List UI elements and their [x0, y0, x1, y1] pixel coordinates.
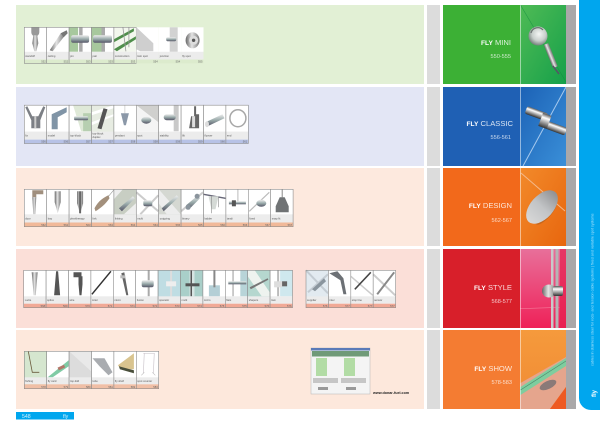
heading: fly show: FLY SHOW [474, 364, 513, 373]
thumb: top-block duplex: duplex [92, 135, 101, 139]
thumb: tube: tube [92, 379, 98, 383]
thumb: ceiling [47, 27, 69, 64]
thumb: plexitherapy: plexitherapy [70, 216, 85, 220]
thumb: junction: junction [159, 54, 169, 58]
thumb: ladder: ladder [204, 216, 212, 220]
thumb: pair [92, 27, 114, 64]
thumb: snap fit [271, 189, 293, 227]
thumb: link [92, 189, 114, 227]
heading: fly style: FLY STYLE [474, 283, 512, 292]
photo: design oval spot [520, 184, 564, 230]
thumb: flyover: flyover [204, 134, 213, 138]
thumb: linking: linking [115, 216, 123, 220]
thumb: spot counter [136, 351, 159, 389]
panel: fly show products [16, 330, 424, 409]
thumb: door: 562 [41, 223, 46, 227]
thumb: inter: 577 [345, 304, 350, 308]
thumb: t-wire: 568 [41, 304, 46, 308]
thumb: junction [159, 27, 181, 64]
thumb: operator: operator [159, 298, 169, 302]
thumb: linking: 564 [131, 223, 136, 227]
thumb: plexitherapy [69, 189, 92, 227]
section card: fly classic [443, 87, 570, 166]
thumb: fly card: fly card [48, 379, 57, 383]
panel: fly design products [16, 168, 424, 246]
thumb: multi: 564 [153, 223, 158, 227]
grey column [427, 5, 440, 409]
thumb: fixed [248, 189, 271, 227]
thumb: end: end [227, 134, 232, 138]
thumb: stability: 559 [176, 140, 181, 144]
thumb: fusion: 572 [153, 304, 158, 308]
thumb: inter: inter [329, 298, 335, 302]
section card: fly mini [443, 5, 566, 84]
thumb: sensor: 577 [390, 304, 395, 308]
thumb: fishing [24, 351, 47, 389]
thumb: micro glass: micro [204, 298, 211, 302]
thumb: stability [159, 105, 181, 144]
thumb: bay: 562 [64, 223, 69, 227]
thumb: top-block duplex [92, 105, 114, 144]
thumb: shapers: shapers [249, 298, 259, 302]
thumb: stability: stability [160, 134, 169, 138]
thumb: micro [113, 270, 136, 308]
thumb: splice: 569 [63, 304, 68, 308]
thumb: t-wire: t-wire [25, 298, 32, 302]
thumb: flyover: 560 [220, 140, 225, 144]
heading: fly design: FLY DESIGN [469, 201, 512, 210]
thumb: fishing: fishing [25, 379, 34, 383]
page range: fly classic: 556-561 [490, 135, 511, 141]
thumb: construction: 553 [131, 60, 136, 64]
thumb: micro: 571 [130, 304, 135, 308]
heading: fly classic: FLY CLASSIC [467, 119, 514, 128]
thumb: binary: 565 [198, 223, 203, 227]
thumb: supplier [306, 270, 328, 308]
thumb: binary [181, 189, 204, 227]
thumb: micro glass: 575 [220, 304, 225, 308]
thumb: top-fold: 580 [86, 385, 91, 389]
photo: show glass clamp [520, 357, 566, 409]
photo: classic double cylinder [522, 106, 570, 136]
thumb: wire: 570 [85, 304, 90, 308]
thumb: pair: pair [92, 54, 97, 58]
thumb: standoff [24, 27, 47, 64]
thumb: shapers [248, 270, 270, 308]
thumb: spot counter: 583 [153, 385, 158, 389]
thumb: spot: 558 [153, 140, 158, 144]
thumb: fusion [136, 270, 158, 308]
thumb: miter: miter [92, 298, 98, 302]
thumbnail strip: fly style accessories [306, 270, 396, 308]
thumb: pendant [114, 105, 136, 144]
thumb: snap fit: 567 [288, 223, 293, 227]
thumb: lift: lift [182, 134, 185, 138]
thumb: pendant: 558 [131, 140, 136, 144]
thumb: top-block: top-block [70, 134, 82, 138]
thumb: binary: binary [182, 216, 190, 220]
thumb: end: 561 [243, 140, 248, 144]
thumb: ceiling: 552 [64, 60, 69, 64]
thumb: stop line: 577 [368, 304, 373, 308]
thumb: fly card [47, 351, 69, 389]
thumb: t-wire [24, 270, 46, 308]
thumb: fix [24, 105, 47, 144]
thumb: multi rail [180, 270, 203, 308]
thumb: bay [47, 189, 69, 227]
grey edge column [566, 5, 576, 409]
thumb: operator: 573 [175, 304, 180, 308]
thumbnail strip: fly design [24, 189, 293, 227]
thumb: wire [68, 270, 91, 308]
thumb: shapers: 576 [265, 304, 270, 308]
thumb: fusion: fusion [137, 298, 144, 302]
thumb: ladder: 566 [220, 223, 225, 227]
thumb: door [24, 189, 47, 227]
thumb: miter: 571 [108, 304, 113, 308]
thumb: flyover [204, 105, 226, 144]
thumb: end [226, 105, 248, 144]
thumb: splice: splice [47, 298, 54, 302]
photo: style rod clamp [542, 249, 563, 328]
thumb: outgoing: outgoing [160, 216, 171, 220]
thumb: multi: multi [137, 216, 143, 220]
thumb: pin [69, 27, 92, 64]
page range: fly style: 568-577 [491, 299, 512, 305]
thumb: construction: construction [115, 54, 130, 58]
panel: fly style products [16, 249, 424, 328]
thumb: supplier: 576 [323, 304, 328, 308]
thumb: top-block duplex: 557 [108, 140, 113, 144]
thumb: fishing: 578 [41, 385, 46, 389]
thumb: model: 556 [64, 140, 69, 144]
thumb: outgoing [159, 189, 181, 227]
thumb: spot [136, 105, 159, 144]
thumb: flats: 575 [242, 304, 247, 308]
thumb: inter [328, 270, 351, 308]
thumb: miter [91, 270, 113, 308]
thumb: tandi: tandi [227, 216, 233, 220]
thumbnail strip: fly classic [24, 105, 248, 144]
page range: fly show: 578-583 [491, 380, 512, 386]
website address: www.donar-fuel.com [372, 391, 410, 395]
thumb: operator [158, 270, 180, 308]
thumb: twin: twin [271, 298, 276, 302]
thumb: top-fold [69, 351, 92, 389]
thumb: fly spot: 555 [198, 60, 203, 64]
thumb: spot: spot [137, 134, 143, 138]
thumb: twin spot [136, 27, 159, 64]
thumb: top-fold: top-fold [70, 379, 80, 383]
thumb: lift: 559 [198, 140, 203, 144]
thumb: junction: 554 [176, 60, 181, 64]
thumb: twin: 576 [287, 304, 292, 308]
thumb: twin spot: 554 [153, 60, 158, 64]
thumb: fly spot: fly spot [182, 54, 191, 58]
side tab brand: fly [592, 389, 598, 397]
website screenshot [311, 348, 370, 394]
thumb: twin [270, 270, 292, 308]
thumb: fixed: fixed [249, 216, 255, 220]
thumb: fly shelf: fly shelf [115, 379, 124, 383]
thumb: tube [92, 351, 114, 389]
thumb: multi [136, 189, 159, 227]
thumb: linking [114, 189, 136, 227]
brand name: fly [63, 414, 69, 420]
thumb: fixed: 567 [265, 223, 270, 227]
section card: fly style [443, 249, 566, 328]
thumb: standoff: standoff [25, 54, 35, 58]
thumb: ladder [204, 189, 226, 227]
thumb: fly shelf [114, 351, 136, 389]
footer tab [16, 412, 74, 420]
thumb: tandi: 566 [243, 223, 248, 227]
thumb: multi rail: 574 [197, 304, 202, 308]
thumbnail strip: fly mini [24, 27, 203, 64]
thumb: wire: wire [70, 298, 75, 302]
thumb: fly shelf: 582 [131, 385, 136, 389]
panel: fly mini products [16, 5, 424, 84]
thumb: sensor: sensor [374, 298, 382, 302]
thumb: micro: micro [114, 298, 121, 302]
thumb: tandi [226, 189, 248, 227]
thumb: top-block [69, 105, 92, 144]
page number: 548 [22, 414, 31, 420]
thumb: pin: 553 [86, 60, 91, 64]
thumb: spot counter: spot counter [137, 379, 152, 383]
thumb: micro glass [203, 270, 225, 308]
thumb: sensor [373, 270, 396, 308]
photo: mini ball fitting [528, 26, 559, 74]
thumb: fix: 556 [41, 140, 46, 144]
thumb: top-block duplex: top-block [92, 132, 104, 136]
thumb: fly card: 579 [64, 385, 69, 389]
thumb: twin spot: twin spot [137, 54, 148, 58]
side tab caption: cables in stainless steel for rods- and tension cable systems | fixed and variable spot systems [590, 213, 594, 366]
heading: fly mini: FLY MINI [481, 38, 511, 47]
thumb: plexitherapy: 563 [86, 223, 91, 227]
thumb: construction [114, 27, 136, 64]
thumb: tube: 581 [108, 385, 113, 389]
thumb: link: 563 [108, 223, 113, 227]
thumb: stop line [351, 270, 373, 308]
thumb: pin: pin [70, 54, 74, 58]
thumb: fly spot [181, 27, 204, 64]
thumb: pendant: pendant [115, 134, 125, 138]
thumb: outgoing: 565 [176, 223, 181, 227]
thumb: lift [181, 105, 204, 144]
thumb: flats: flats [226, 298, 232, 302]
thumb: pair: 553 [108, 60, 113, 64]
thumbnail strip: fly show [24, 351, 159, 389]
thumb: flats [225, 270, 248, 308]
thumb: splice [46, 270, 68, 308]
thumb: standoff: 552 [41, 60, 46, 64]
page range: fly design: 562-567 [491, 218, 512, 224]
panel: fly classic products [16, 87, 424, 166]
thumb: top-block: 557 [86, 140, 91, 144]
thumb: stop line: stop line [352, 298, 362, 302]
thumb: model: model [48, 134, 55, 138]
thumb: door: door [25, 216, 31, 220]
thumb: snap fit: snap fit [272, 216, 281, 220]
section card: fly show [443, 330, 566, 409]
page range: fly mini: 550-555 [490, 54, 511, 60]
thumb: fix: fix [25, 134, 29, 138]
thumb: supplier: supplier [307, 298, 317, 302]
thumb: link: link [92, 216, 97, 220]
thumb: model [47, 105, 69, 144]
thumb: bay: bay [48, 216, 53, 220]
thumb: ceiling: ceiling [48, 54, 56, 58]
section card: fly design [443, 168, 566, 246]
thumb: multi rail: multi [182, 298, 188, 302]
blue side tab [579, 0, 600, 410]
thumbnail strip: fly style [24, 270, 292, 308]
